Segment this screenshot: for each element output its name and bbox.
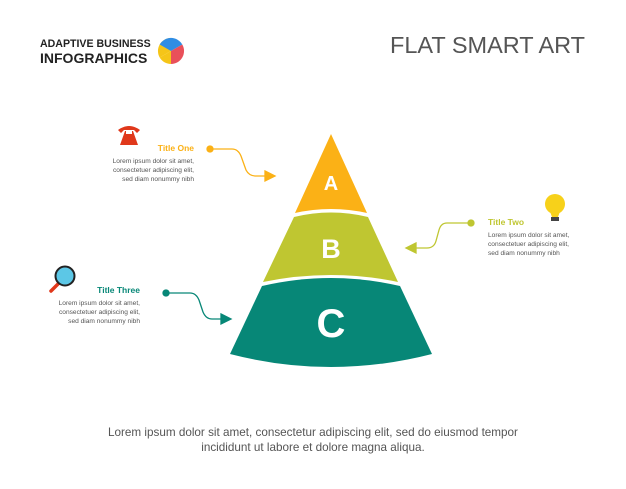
segment A: A [324, 173, 338, 195]
text block: title three [59, 285, 140, 325]
text block: title two: Lorem ipsum dolor sit amet, [488, 232, 569, 239]
text block: title three: Title Three [97, 285, 140, 295]
segment B [263, 212, 398, 282]
text block: title one: sed diam nonummy nibh [122, 176, 194, 183]
title: FLAT SMART ART [390, 32, 585, 58]
bottom text [108, 426, 518, 454]
logo text: INFOGRAPHICS [40, 50, 147, 66]
text block: title two [488, 217, 569, 257]
icon: logo pie [158, 38, 184, 64]
icon: light bulb [545, 194, 565, 221]
segment C [230, 278, 432, 367]
logo text [40, 38, 151, 66]
segment A [295, 134, 367, 213]
arrow: two [406, 220, 474, 253]
text block: title three: sed diam nonummy nibh [68, 318, 140, 325]
arrow: one [207, 146, 275, 181]
text block: title one: Lorem ipsum dolor sit amet, [113, 158, 194, 165]
text block: title one: consectetuer adipiscing elit, [113, 167, 194, 174]
bottom text: incididunt ut labore et dolore magna aliqua. [201, 441, 425, 454]
logo text: ADAPTIVE BUSINESS [40, 38, 151, 50]
text block: title three: consectetuer adipiscing elit, [59, 309, 140, 316]
text block: title two: Title Two [488, 217, 524, 227]
icon: telephone [118, 126, 140, 145]
bottom text: Lorem ipsum dolor sit amet, consectetur adipiscing elit, sed do eiusmod tempor [108, 426, 518, 439]
segment B: B [321, 234, 341, 264]
text block: title one: Title One [158, 143, 194, 153]
icon: magnifier [49, 266, 76, 293]
segment C: C [317, 302, 345, 346]
text block: title two: consectetuer adipiscing elit, [488, 241, 569, 248]
text block: title one [113, 143, 194, 183]
arrow: three [163, 290, 231, 324]
text block: title two: sed diam nonummy nibh [488, 250, 560, 257]
text block: title three: Lorem ipsum dolor sit amet, [59, 300, 140, 307]
